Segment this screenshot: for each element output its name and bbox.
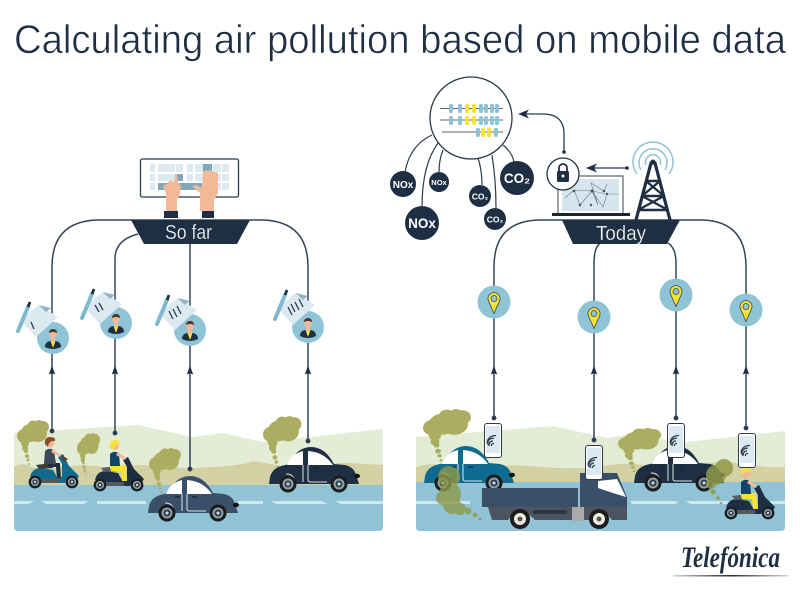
connector lines: right (492, 220, 748, 442)
NOx bubble 1: NOx (393, 180, 414, 191)
arrows: left (49, 366, 311, 374)
title: Calculating air pollution based on mobile data (14, 18, 786, 62)
surveyor 1 (18, 302, 69, 354)
smoke: left vehicles (17, 416, 301, 493)
car: dark (634, 446, 725, 492)
arrow: laptop to data hub (518, 110, 566, 154)
location pins (478, 278, 762, 334)
pollutant bubbles (390, 161, 534, 240)
smoke: right back vehicles (423, 409, 661, 472)
truck (482, 473, 627, 529)
landscape: right (416, 426, 786, 531)
connector lines: left (50, 220, 310, 471)
CO2 bubble 3 (500, 161, 534, 195)
scooter 2 (94, 440, 144, 491)
CO2 bubble 2 (484, 208, 506, 230)
CO2 bubble 1 (469, 185, 491, 207)
landscape: left (14, 425, 383, 531)
icon: lock (547, 158, 579, 190)
CO2 bubble 1: CO₂ (472, 192, 488, 202)
icon: laptop with map (552, 176, 630, 216)
heading: today: Today (596, 223, 646, 245)
NOx bubble 1 (390, 171, 416, 197)
panel: so far (14, 159, 383, 531)
scooter 1 (29, 437, 79, 488)
heading: so far: So far (165, 222, 212, 244)
car: blue (424, 446, 515, 492)
icon: cell tower (633, 142, 673, 220)
scooter 3 (725, 468, 775, 519)
surveyor 3 (157, 295, 206, 346)
surveyor 4 (275, 290, 324, 343)
car: left road (148, 476, 239, 522)
smoke: truck exhaust (436, 466, 482, 521)
heading: today (562, 220, 680, 245)
surveyor 2 (82, 289, 132, 339)
panel: today (390, 77, 786, 531)
arrows: right (491, 366, 749, 374)
car: back road (269, 447, 360, 492)
data hub circle (430, 77, 512, 159)
NOx bubble 3 (429, 172, 449, 192)
NOx bubble 2: NOx (408, 216, 436, 231)
heading: so far (131, 220, 250, 244)
NOx bubble 3: NOx (431, 178, 448, 187)
phones (484, 424, 756, 480)
arrow: tower to laptop (586, 164, 629, 172)
NOx bubble 2 (405, 206, 439, 240)
emission curves (405, 135, 514, 208)
icon: keyboard and hands (140, 159, 238, 218)
smoke: scooter exhaust (706, 459, 733, 504)
icons: surveyors and forms (18, 289, 324, 354)
CO2 bubble 3: CO₂ (504, 171, 530, 186)
CO2 bubble 2: CO₂ (487, 214, 503, 224)
